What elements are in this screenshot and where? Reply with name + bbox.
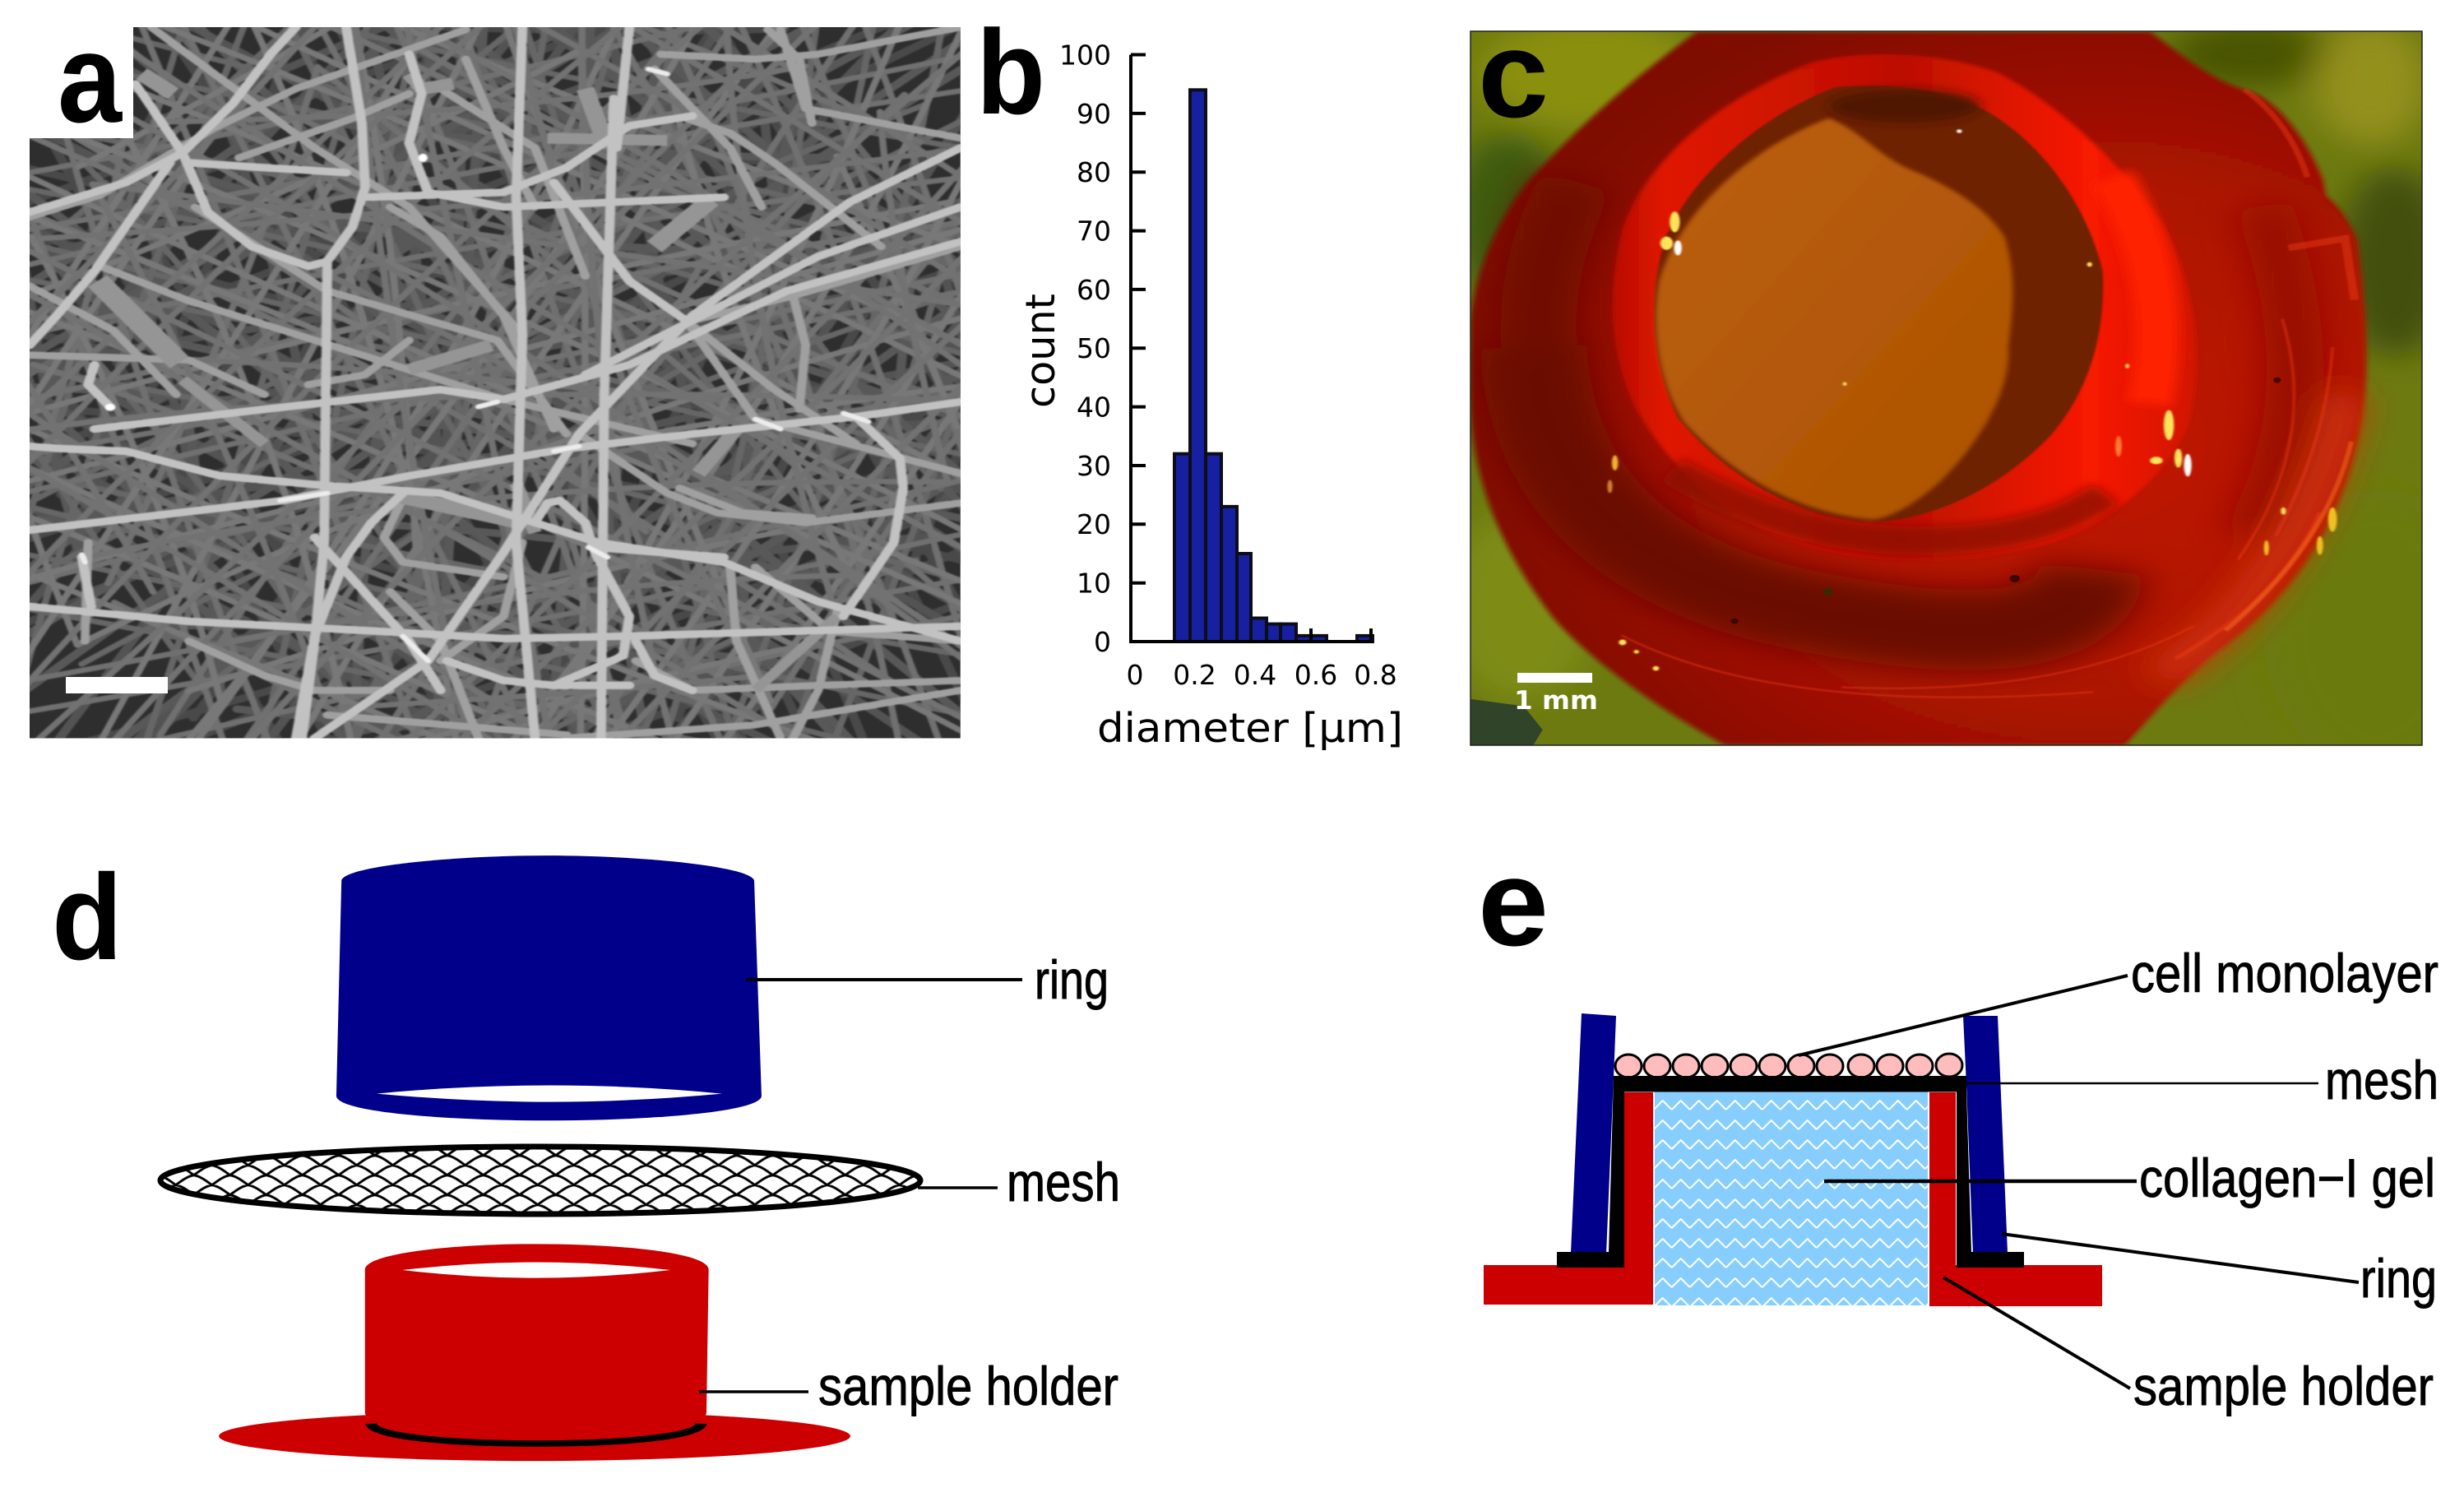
- axes and ticks: [1131, 54, 1373, 642]
- collagen gel: [1654, 1091, 1929, 1306]
- deep fibre layers: [30, 27, 961, 739]
- y tick labels: 80: [1077, 156, 1111, 188]
- bars: [1174, 90, 1373, 642]
- x tick labels: [1127, 659, 1397, 691]
- ring label: ring: [1035, 949, 1109, 1010]
- y tick labels: [1059, 39, 1111, 658]
- x tick labels: 0: [1127, 659, 1143, 691]
- bright main fibres: [30, 27, 961, 738]
- sample holder label: sample holder: [818, 1356, 1119, 1416]
- y tick labels: 50: [1077, 332, 1111, 364]
- x tick labels: 0.4: [1234, 659, 1276, 691]
- y tick labels: 30: [1077, 450, 1111, 482]
- x axis title: diameter [µm]: [1097, 705, 1403, 752]
- y tick labels: 100: [1059, 39, 1111, 71]
- specular highlights: [1607, 129, 2337, 670]
- mesh leader line: [918, 1186, 998, 1189]
- y tick labels: 20: [1077, 508, 1111, 540]
- micrograph fibres: [30, 27, 961, 739]
- outer flange of holder: [1471, 31, 2366, 745]
- sample holder leader line: [699, 1390, 808, 1393]
- y tick labels: 40: [1077, 392, 1111, 423]
- well: [1655, 86, 2103, 522]
- ring cross-section left: [1571, 1013, 1616, 1254]
- y tick labels: 0: [1094, 626, 1111, 658]
- panel a: SEM micrograph of fibre mesh: [30, 27, 961, 739]
- bright right ring glow: [2112, 177, 2157, 404]
- scale bar: [1517, 673, 1592, 683]
- photo: [1471, 31, 2421, 745]
- y tick labels: 10: [1077, 568, 1111, 599]
- leader lines: [1799, 976, 2359, 1388]
- label e: e: [1478, 833, 1549, 971]
- background tone variations: [1471, 31, 2421, 701]
- dark upper well: [1829, 90, 1980, 123]
- panel c: photograph of the mounted sample: [1470, 30, 2423, 746]
- wide diffuse fibres: [98, 74, 837, 690]
- label b: b: [976, 5, 1045, 139]
- ring cross-section right: [1963, 1016, 2008, 1254]
- dark specks and lower-left clip: [1471, 378, 2281, 745]
- flange rim rings: [1621, 90, 2355, 698]
- photo border: [1471, 31, 2422, 745]
- mesh disc: [160, 1146, 920, 1215]
- ring part: [336, 855, 762, 1120]
- cell monolayer: [1615, 1054, 1962, 1078]
- y axis title: count: [1017, 294, 1064, 408]
- y tick labels: 70: [1077, 216, 1111, 247]
- mesh cross-section: [1557, 1076, 2024, 1268]
- mesh label: mesh: [1007, 1152, 1120, 1212]
- y tick labels: 60: [1077, 274, 1111, 306]
- x tick labels: 0.8: [1354, 659, 1397, 691]
- lower ring shadow: [1672, 470, 2106, 540]
- raised cylinder ring: [1613, 54, 2197, 561]
- bright crossing glints: [81, 69, 868, 661]
- y tick labels: 90: [1077, 98, 1111, 130]
- mesh label: mesh: [2325, 1050, 2439, 1110]
- mid-tone traced fibres: [30, 27, 961, 738]
- panel b: histogram of fibre diameters: [976, 5, 1403, 752]
- flange shading: [1533, 182, 2345, 678]
- ring leader line: [746, 978, 1022, 981]
- label c: c: [1478, 5, 1549, 143]
- orange collagen gel disc: [1656, 118, 2012, 520]
- panel d: exploded view of the assembly: [52, 850, 1120, 1461]
- x tick labels: 0.2: [1173, 659, 1216, 691]
- label a: a: [58, 7, 123, 149]
- scale label: 1 mm: [1514, 686, 1598, 716]
- scale bar: [66, 677, 168, 693]
- x tick labels: 0.6: [1295, 659, 1337, 691]
- label d: d: [52, 850, 123, 985]
- ring label: ring: [2360, 1248, 2437, 1309]
- sample holder part: [219, 1244, 850, 1461]
- middle fibre layers: [30, 27, 961, 739]
- panel e: cross-section of the assembly: [1478, 833, 2439, 1416]
- white label corner: [25, 23, 133, 138]
- holder cross-section: [1484, 1092, 2102, 1306]
